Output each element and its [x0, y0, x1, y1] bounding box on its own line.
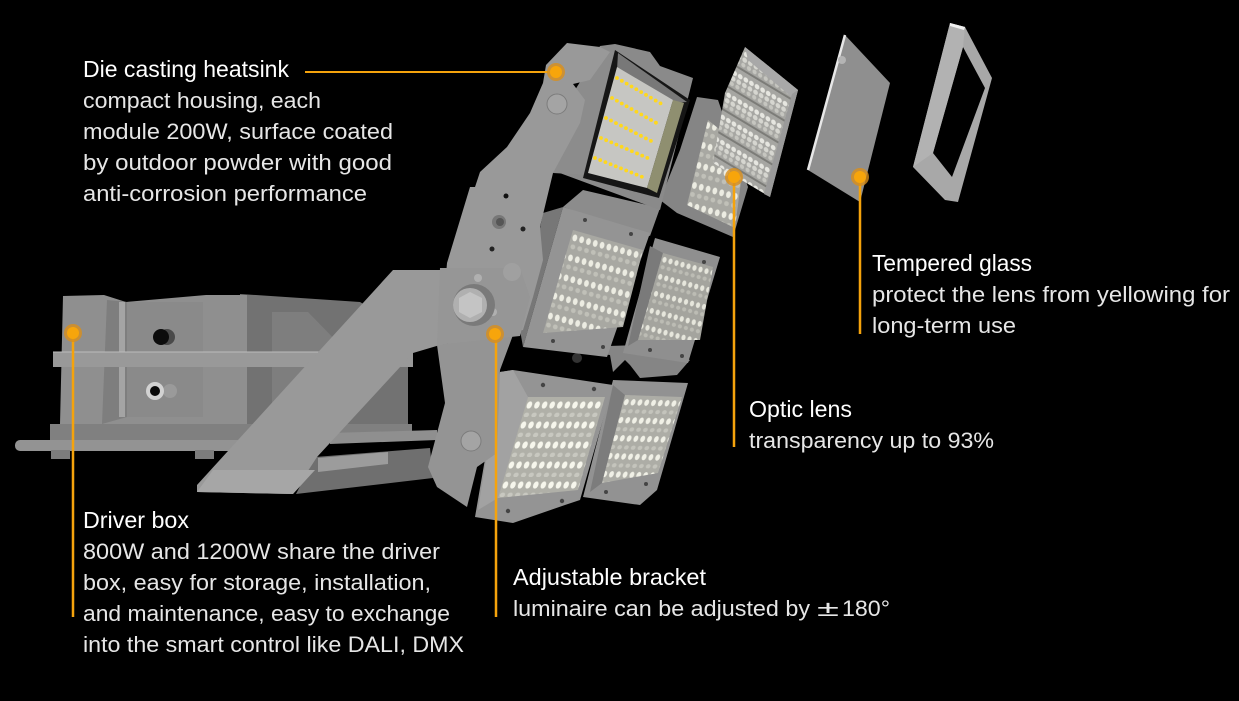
leader line: [495, 334, 497, 617]
bottom right module: [583, 380, 688, 505]
description: 180°: [842, 596, 890, 621]
leader line: [72, 333, 74, 617]
marker dot: [486, 325, 504, 343]
description: module 200W, surface coated: [83, 119, 393, 144]
lower plate: [428, 335, 513, 507]
heading: Die casting heatsink: [83, 56, 289, 82]
description: 800W and 1200W share the driver: [83, 539, 440, 564]
exploded front frame: [913, 23, 992, 202]
leader line: [859, 177, 861, 334]
description: ±: [817, 596, 839, 621]
description: luminaire can be adjusted by: [513, 596, 810, 621]
callout: tempered glass: [851, 168, 1230, 338]
product: floodlight assembly: [15, 23, 992, 523]
description: [83, 539, 464, 657]
description: box, easy for storage, installation,: [83, 570, 431, 595]
diagonal bracket arm: [197, 270, 440, 494]
marker dot: [547, 63, 565, 81]
marker dot: [725, 168, 743, 186]
module connecting brackets: [545, 190, 690, 378]
bottom left module: [475, 370, 613, 523]
leader line: [733, 177, 735, 447]
description: [83, 88, 393, 206]
upper arm plate: [440, 43, 610, 345]
LED rows: [595, 78, 665, 178]
mounting bracket: [197, 43, 610, 507]
leader line: [305, 71, 556, 73]
open LED module: [553, 44, 693, 210]
callout: adjustable bracket: [486, 325, 890, 621]
description: by outdoor powder with good: [83, 150, 392, 175]
description: anti-corrosion performance: [83, 181, 367, 206]
driver box: [15, 294, 437, 494]
heading: Adjustable bracket: [513, 564, 707, 590]
description: into the smart control like DALI, DMX: [83, 632, 464, 657]
marker dot: [64, 324, 82, 342]
marker dot: [851, 168, 869, 186]
description: and maintenance, easy to exchange: [83, 601, 450, 626]
exploded tempered glass: [808, 35, 890, 202]
callout: die casting heatsink: [83, 56, 565, 206]
callout: driver box: [64, 324, 464, 657]
heading: Driver box: [83, 507, 189, 533]
callout: optic lens: [725, 168, 994, 453]
rear module: [660, 97, 748, 237]
heading: Optic lens: [749, 396, 852, 422]
icon: cable gland: [146, 382, 177, 400]
description: protect the lens from yellowing for: [872, 282, 1230, 307]
exploded optic lens plate: [713, 47, 798, 197]
heading: Tempered glass: [872, 250, 1032, 276]
icon: connector plug: [153, 329, 175, 345]
description: transparency up to 93%: [749, 428, 994, 453]
description: [872, 282, 1230, 338]
description: compact housing, each: [83, 88, 321, 113]
description: long-term use: [872, 313, 1016, 338]
middle right module: [623, 238, 720, 363]
bolts: [453, 94, 567, 451]
middle left module: [520, 207, 650, 357]
